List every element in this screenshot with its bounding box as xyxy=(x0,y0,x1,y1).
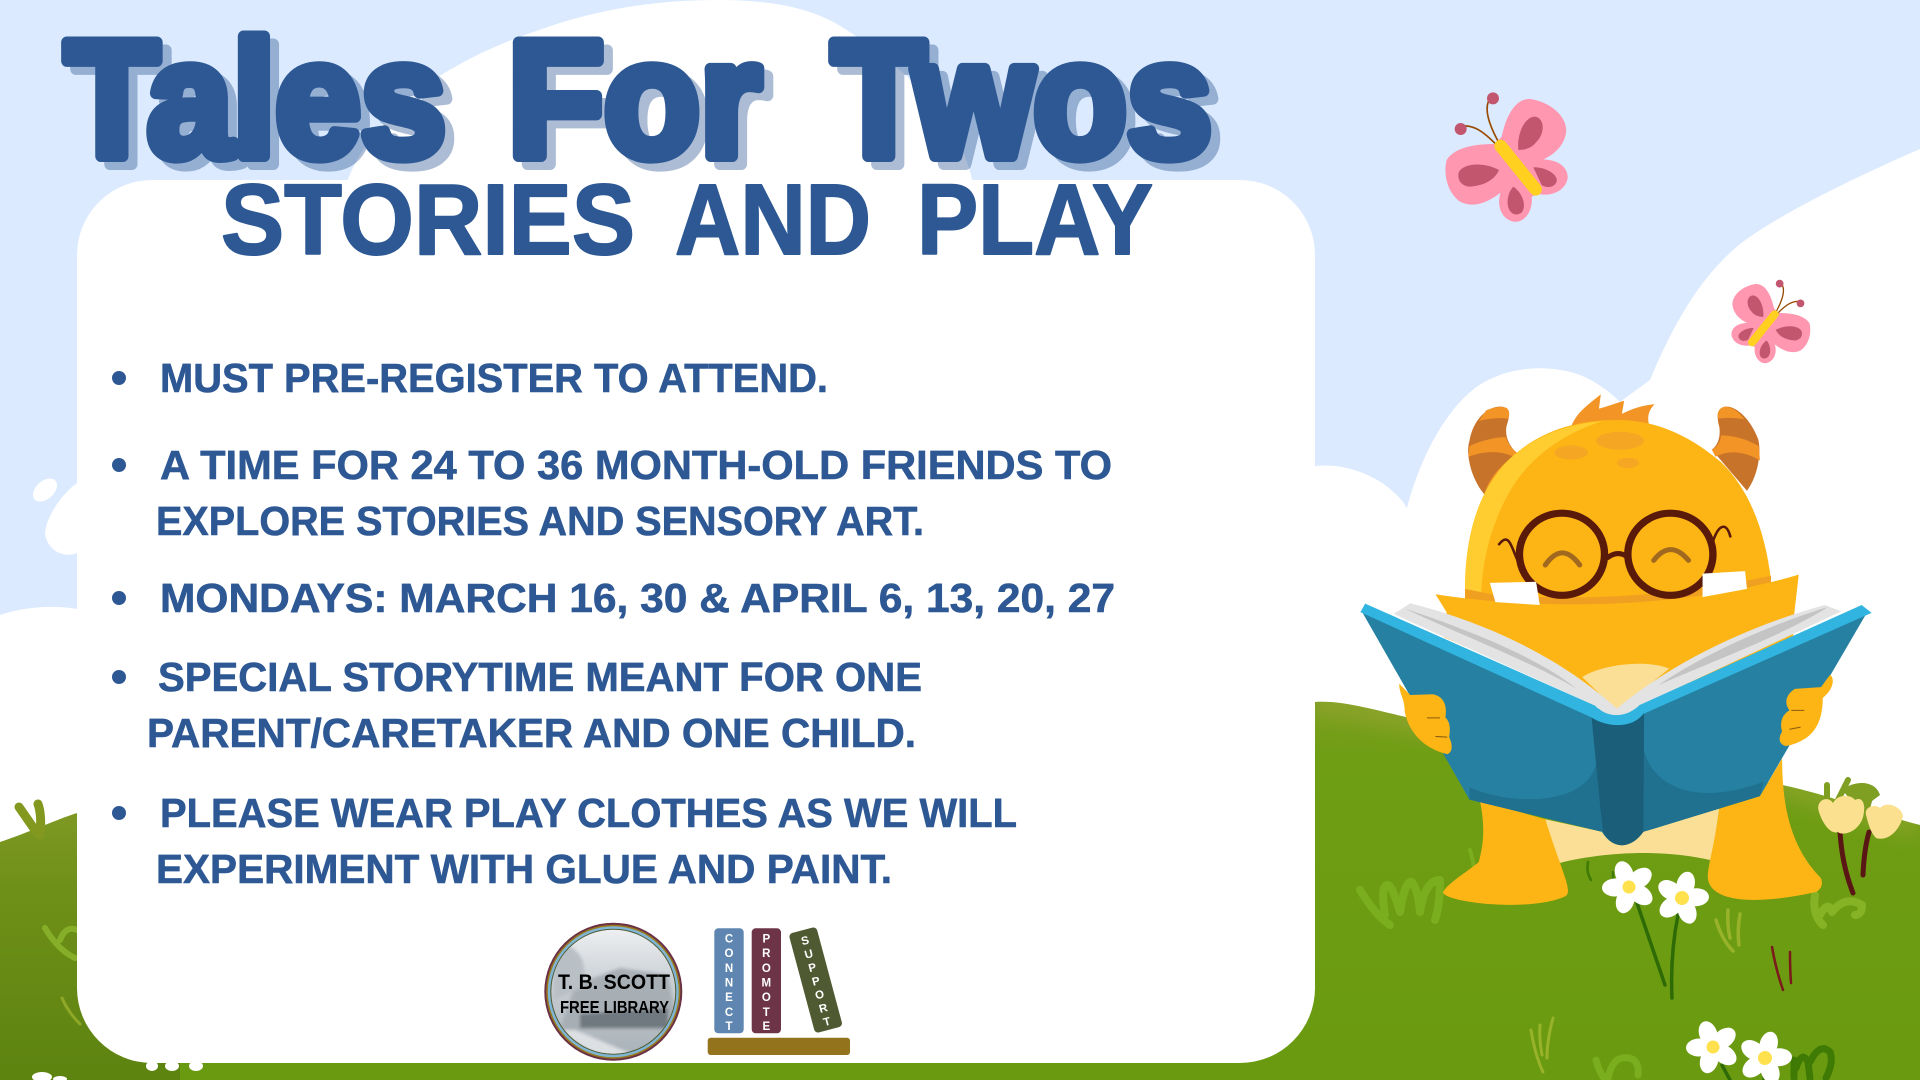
bullet: age range: A TIME FOR 24 TO 36 MONTH-OLD FRIENDS TO xyxy=(160,442,1112,488)
book: connect: CONNECT xyxy=(725,934,734,1033)
bullet: age range xyxy=(112,442,1112,544)
book: connect xyxy=(714,928,744,1033)
subtitle: AND xyxy=(675,164,871,276)
monster hands xyxy=(1399,675,1833,754)
bullet: dates: MONDAYS: MARCH 16, 30 & APRIL 6, 13, 20, 27 xyxy=(160,575,1115,621)
library logo xyxy=(544,923,682,1061)
library logo: FREE LIBRARY xyxy=(560,997,669,1017)
book: support: SUPPORT xyxy=(799,934,833,1029)
bullet: age range: EXPLORE STORIES AND SENSORY ART. xyxy=(156,498,924,544)
monster hair xyxy=(1571,394,1654,426)
cream belly xyxy=(1545,664,1719,863)
small white flowers at bottom left xyxy=(32,1061,203,1080)
book: promote xyxy=(752,928,781,1033)
title: Twos xyxy=(832,7,1212,191)
book: promote: PROMOTE xyxy=(762,934,771,1033)
bullet: play clothes: EXPERIMENT WITH GLUE AND PAINT. xyxy=(156,846,892,892)
monster reading a book xyxy=(1360,394,1872,905)
bullet: pre-register: MUST PRE-REGISTER TO ATTEND. xyxy=(160,355,828,401)
bookshelf logo xyxy=(708,927,850,1055)
bullet list xyxy=(112,355,1115,892)
butterfly: large xyxy=(1445,92,1568,222)
grass tufts xyxy=(19,804,1862,1080)
library logo: T. B. SCOTT xyxy=(558,971,670,994)
title: Tales xyxy=(65,7,446,191)
round glasses xyxy=(1499,513,1730,595)
grassy hill xyxy=(0,702,1920,1080)
yellow flowers xyxy=(1818,780,1903,893)
open book xyxy=(1360,603,1872,845)
panel: white rounded information card xyxy=(77,180,1315,1063)
butterfly: small xyxy=(1731,280,1810,363)
bullet: attendance: SPECIAL STORYTIME MEANT FOR ONE xyxy=(158,654,922,700)
subtitle xyxy=(221,164,1153,276)
bullet: attendance xyxy=(112,654,922,756)
monster horns xyxy=(1468,407,1760,494)
monster head and body xyxy=(1435,420,1799,712)
smiling eyes xyxy=(1545,550,1689,565)
monster legs xyxy=(1443,759,1822,905)
subtitle: PLAY xyxy=(917,164,1153,276)
bullet: play clothes: PLEASE WEAR PLAY CLOTHES AS WE WILL xyxy=(160,790,1017,836)
bullet: attendance: PARENT/CARETAKER AND ONE CHILD. xyxy=(147,710,916,756)
monster head spots xyxy=(1555,432,1644,468)
subtitle: STORIES xyxy=(221,164,635,276)
white daisies xyxy=(1593,852,1799,1080)
shelf xyxy=(708,1038,850,1055)
title: For xyxy=(508,7,761,191)
bullet: play clothes xyxy=(112,790,1017,892)
white patches over glasses xyxy=(1490,571,1747,605)
title xyxy=(65,7,1212,191)
book: support xyxy=(789,927,843,1033)
